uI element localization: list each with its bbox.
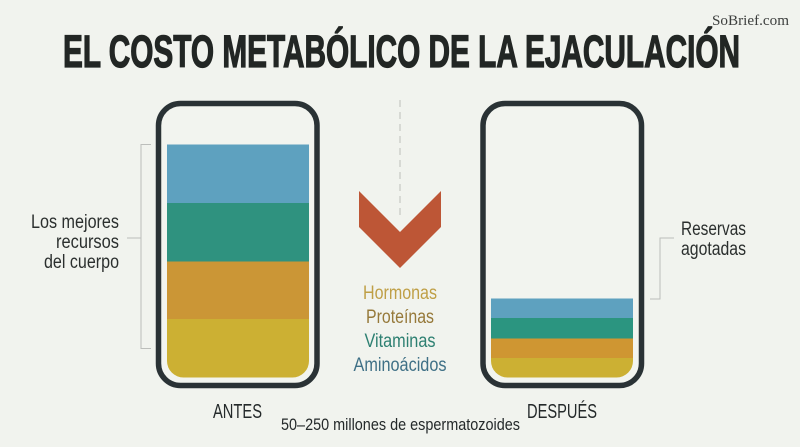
label: best resources: [31, 212, 119, 273]
list of depleted nutrients: [354, 283, 446, 376]
container: after: [483, 104, 642, 386]
list of depleted nutrients: Proteínas: [366, 307, 434, 328]
list of depleted nutrients: Vitaminas: [364, 331, 436, 352]
list of depleted nutrients: Hormonas: [363, 283, 437, 304]
label: best resources: del cuerpo: [44, 252, 119, 273]
label: before: ANTES: [213, 401, 262, 423]
bracket: depleted reserves: [650, 238, 674, 299]
watermark: SoBrief.com: [712, 13, 789, 29]
list of depleted nutrients: Aminoácidos: [354, 355, 446, 376]
label: depleted reserves: agotadas: [681, 239, 746, 260]
icon: down chevron arrow: [359, 191, 441, 268]
label: best resources: recursos: [56, 232, 119, 253]
label: depleted reserves: [681, 219, 746, 260]
bracket: best resources: [127, 144, 151, 348]
label: after: DESPUÉS: [527, 400, 597, 423]
label: depleted reserves: Reservas: [681, 219, 746, 240]
container: before: [158, 104, 317, 386]
stacked layers: before: [167, 144, 309, 378]
stacked layers: after: [491, 298, 633, 378]
dashed guide line: [399, 100, 401, 220]
caption: sperm count: 50–250 millones de espermatozoides: [281, 415, 520, 434]
label: best resources: Los mejores: [31, 212, 119, 233]
